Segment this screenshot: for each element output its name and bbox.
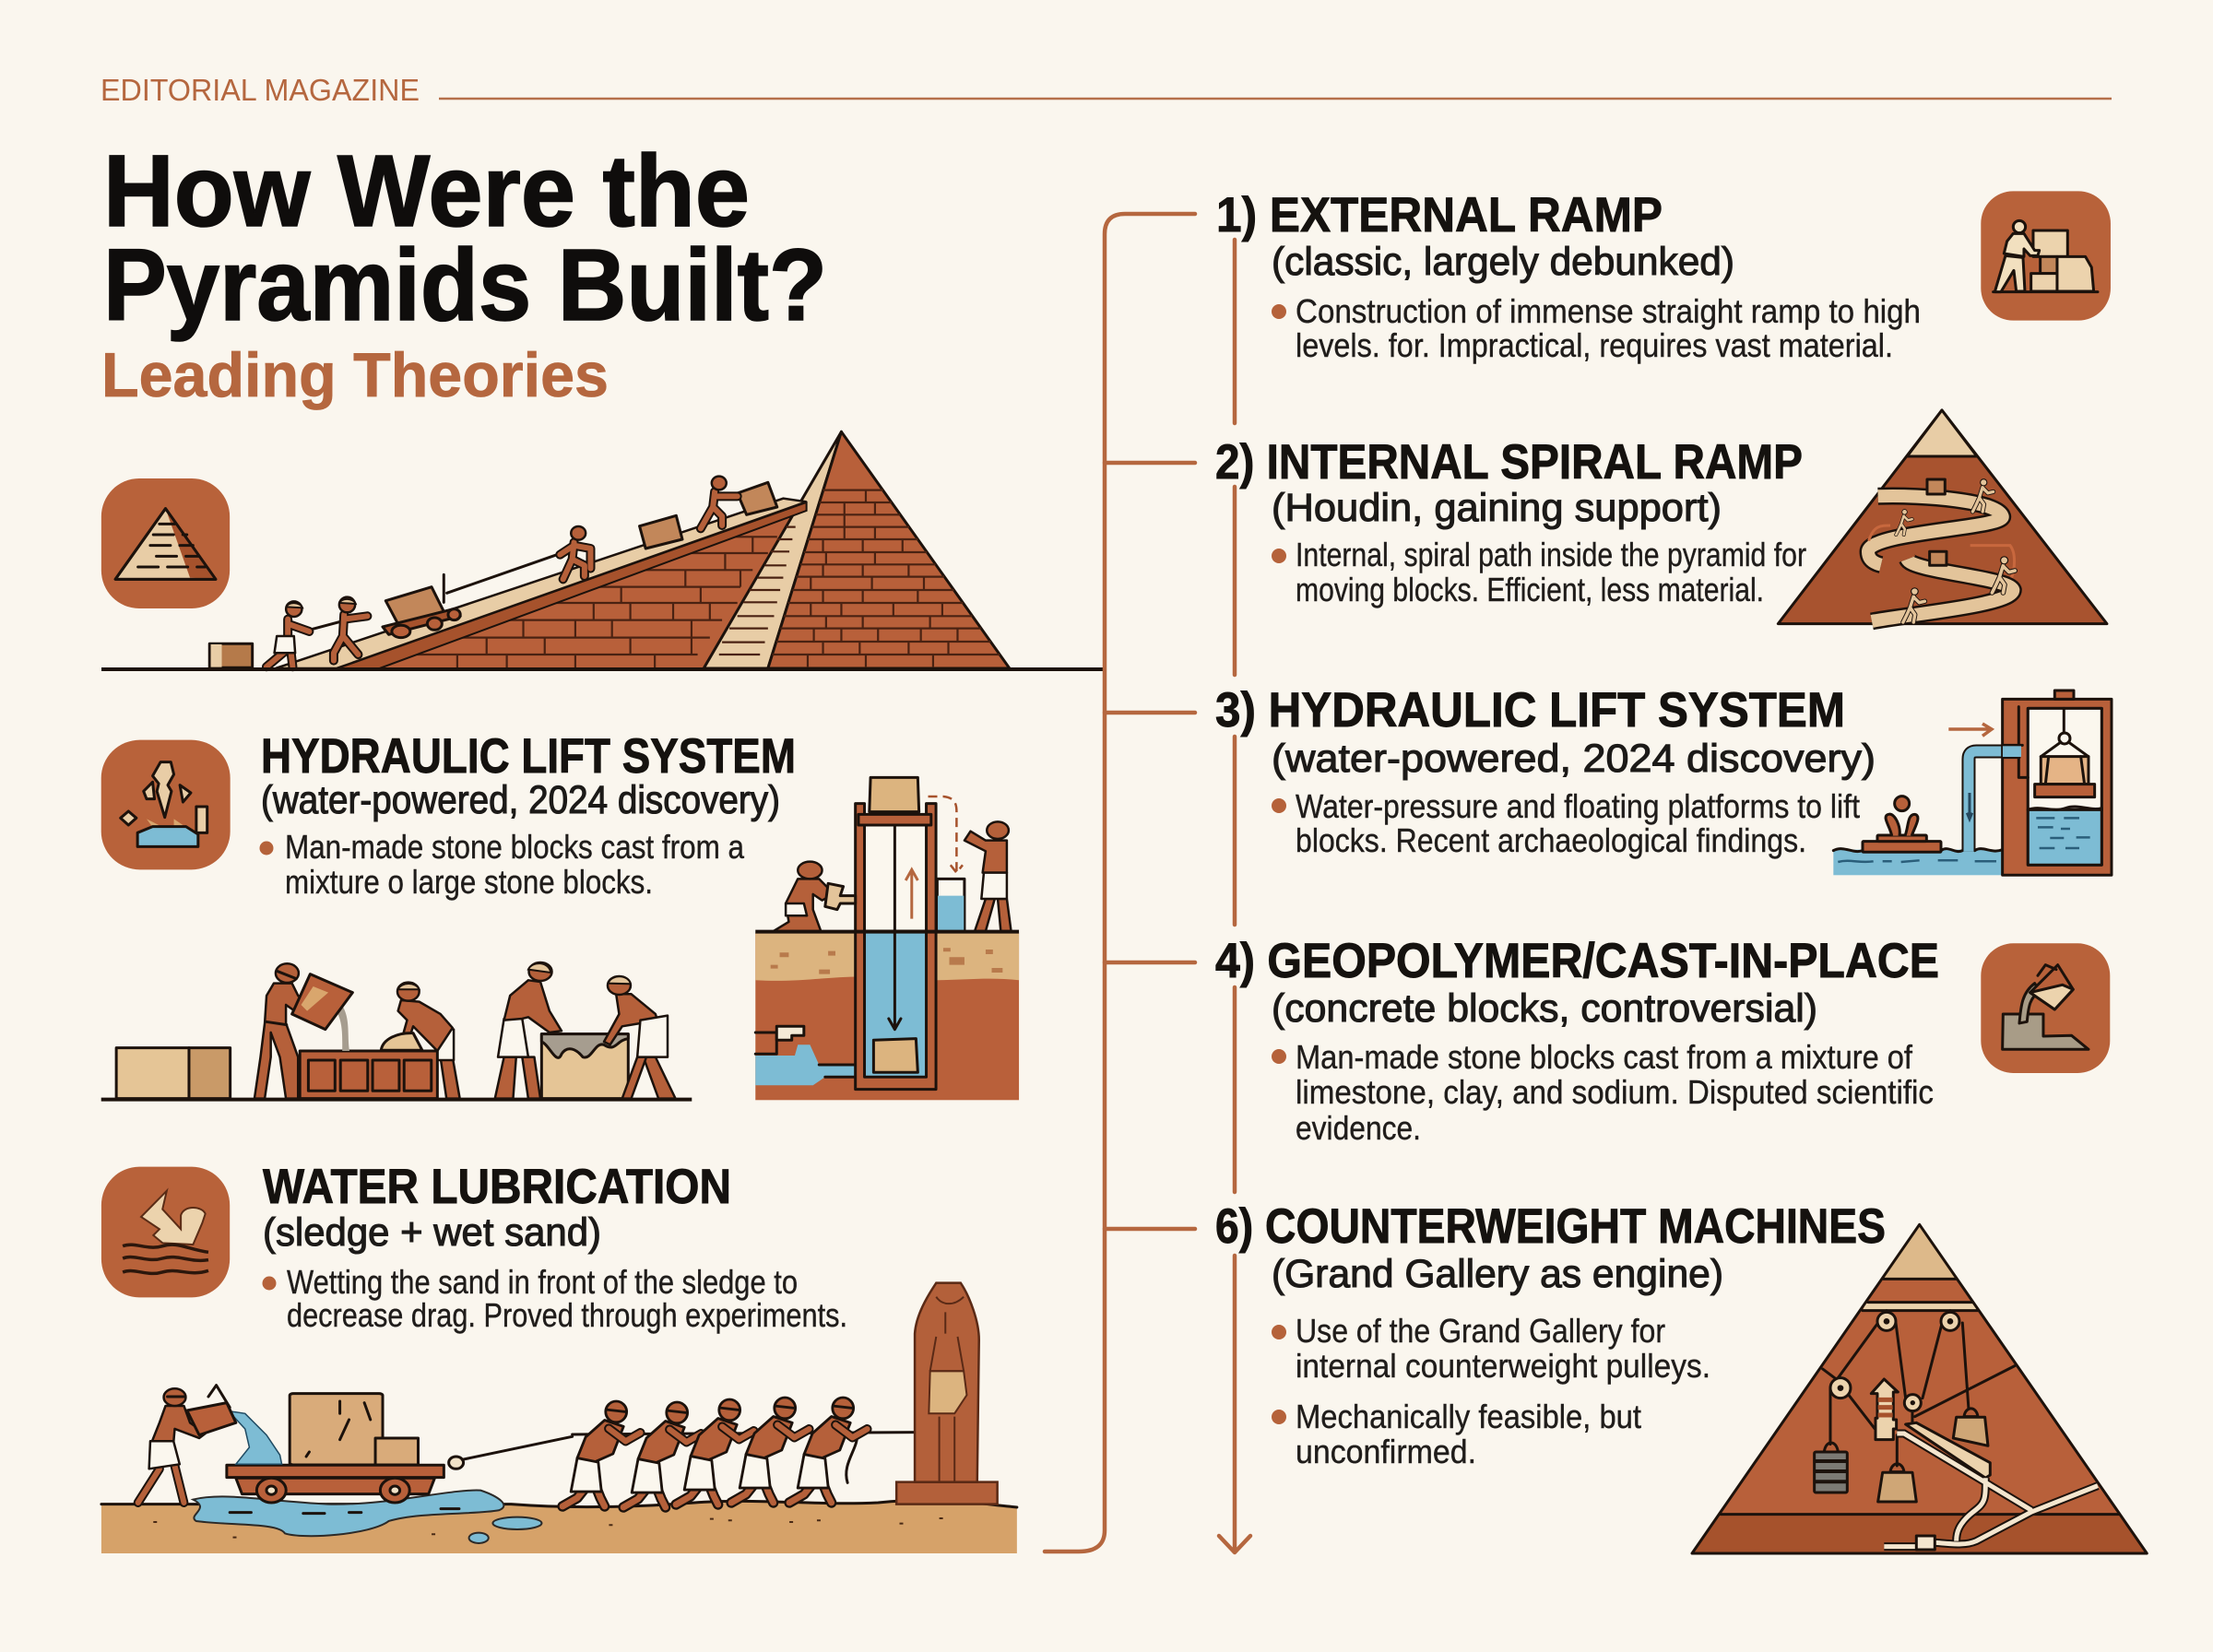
theory 2: internal spiral ramp: Internal, spiral path inside the pyramid for	[1296, 536, 1806, 573]
ramp brick base	[337, 502, 807, 668]
blocks on ramp	[640, 515, 682, 549]
theory 1: external ramp: Construction of immense straight ramp to high	[1296, 292, 1921, 330]
theory 4: geopolymer	[1215, 934, 1939, 1147]
standing worker right	[604, 976, 676, 1099]
magazine label: EDITORIAL MAGAZINE	[101, 73, 420, 107]
theory 2: internal spiral ramp: (Houdin, gaining support)	[1272, 486, 1722, 530]
subtitle: Leading Theories	[101, 340, 609, 410]
light slab	[704, 431, 841, 668]
illustration: hydraulic platform	[1833, 690, 2112, 875]
title: How Were the	[103, 135, 750, 248]
soil	[755, 933, 1019, 1100]
theory 4: geopolymer: (concrete blocks, controversial)	[1272, 986, 1817, 1031]
puddle	[193, 1491, 503, 1536]
tank	[937, 879, 964, 931]
worker behind mold	[397, 983, 460, 1099]
faucet	[776, 1026, 804, 1040]
cart with block	[383, 587, 460, 638]
arrow	[1948, 724, 1992, 736]
illustration: sledge on wet sand	[101, 1283, 1017, 1553]
standing worker	[964, 821, 1012, 931]
theory 1: external ramp: (classic, largely debunked)	[1272, 240, 1734, 284]
theory 1: external ramp	[1216, 188, 1921, 364]
ramp workers	[1896, 479, 2015, 622]
illustration: external ramp pyramid	[209, 431, 1010, 668]
theory 6: counterweight machines: 6) COUNTERWEIGHT MACHINES	[1215, 1199, 1886, 1254]
worker	[1994, 220, 2040, 292]
left section: hydraulic text	[260, 729, 796, 901]
frame	[2003, 699, 2112, 875]
shaft ground line	[755, 930, 1019, 934]
weights	[1815, 1409, 1988, 1502]
kneeling worker	[774, 862, 856, 931]
stone blocks	[290, 1394, 383, 1465]
icon: pyramid	[101, 478, 230, 608]
ground line	[101, 667, 1105, 671]
theory 2: internal spiral ramp: 2) INTERNAL SPIRAL RAMP	[1215, 435, 1803, 490]
bucket	[187, 1403, 236, 1435]
left section: hydraulic text: mixture o large stone blocks.	[285, 863, 653, 901]
icon: water lubrication	[101, 1167, 230, 1297]
theory 4: geopolymer: evidence.	[1296, 1109, 1421, 1147]
left section: water lubrication text: decrease drag. Proved through experiments.	[287, 1296, 847, 1334]
theory 6: counterweight machines: Use of the Grand Gallery for	[1296, 1312, 1665, 1350]
water channel	[755, 1044, 865, 1085]
icon: pouring concrete	[1981, 943, 2110, 1073]
icon: hydraulic block casting	[101, 740, 231, 869]
workers on ramp	[266, 477, 738, 667]
theory 6: counterweight machines: (Grand Gallery as engine)	[1272, 1252, 1723, 1296]
pipe	[1969, 751, 2022, 851]
raft	[1863, 842, 1941, 852]
sand	[101, 1500, 1017, 1553]
shaft tower	[1871, 1379, 1898, 1440]
theory 6: counterweight machines	[1215, 1199, 1886, 1470]
dashed arrow	[929, 796, 963, 873]
poured stream	[328, 997, 349, 1051]
main pyramid face	[768, 431, 1010, 668]
left section: hydraulic text: HYDRAULIC LIFT SYSTEM	[261, 729, 796, 784]
theory 3: hydraulic lift system: blocks. Recent archaeological findings.	[1296, 821, 1806, 859]
left section: water lubrication text: (sledge + wet sand)	[263, 1210, 601, 1255]
illustration: hydraulic shaft	[755, 777, 1019, 1100]
theory 6: counterweight machines: unconfirmed.	[1296, 1433, 1476, 1470]
theory 1: external ramp: levels. for. Impractical, requires vast material.	[1296, 326, 1893, 364]
mold box	[300, 1051, 437, 1099]
theory 3: hydraulic lift system	[1215, 683, 1876, 859]
theory 6: counterweight machines: internal counterweight pulleys.	[1296, 1347, 1710, 1385]
statue	[896, 1482, 998, 1504]
water stream	[229, 1411, 282, 1464]
seated person	[1895, 796, 1910, 811]
title: Pyramids Built?	[103, 229, 827, 342]
theory 2: internal spiral ramp: moving blocks. Efficient, less material.	[1296, 571, 1764, 608]
illustration: counterweight pyramid	[1692, 1224, 2147, 1553]
theory 1: external ramp: 1) EXTERNAL RAMP	[1216, 188, 1663, 242]
rope	[449, 1457, 464, 1469]
shaft	[865, 825, 927, 933]
pulley ropes	[1823, 1311, 2015, 1466]
pulling workers	[562, 1398, 867, 1507]
theory 4: geopolymer: limestone, clay, and sodium. Disputed scientific	[1296, 1073, 1934, 1111]
ramp surface	[337, 502, 807, 668]
ropes	[309, 555, 557, 630]
grand gallery	[1906, 1422, 1990, 1478]
standing worker left	[495, 962, 562, 1099]
pouring worker	[138, 1388, 206, 1503]
theory 4: geopolymer: 4) GEOPOLYMER/CAST-IN-PLACE	[1215, 934, 1939, 988]
bucket	[292, 974, 352, 1030]
theory 3: hydraulic lift system: (water-powered, 2024 discovery)	[1272, 737, 1876, 781]
worker pouring	[254, 963, 319, 1099]
left section: hydraulic text: (water-powered, 2024 discovery)	[261, 778, 780, 822]
sledge	[236, 1478, 434, 1494]
illustration: spiral ramp pyramid	[1778, 410, 2107, 624]
theory 3: hydraulic lift system: 3) HYDRAULIC LIFT SYSTEM	[1215, 683, 1845, 738]
left section: water lubrication text	[262, 1160, 847, 1334]
left section: water lubrication text: WATER LUBRICATION	[263, 1160, 731, 1214]
round stone	[381, 1033, 422, 1050]
theory 2: internal spiral ramp	[1215, 435, 1806, 608]
theory 3: hydraulic lift system: Water-pressure and floating platforms to lift	[1296, 787, 1860, 825]
finished block	[116, 1048, 189, 1099]
pulleys	[1830, 1312, 1959, 1411]
suspended block	[2063, 708, 2065, 733]
illustration: casting blocks	[101, 962, 692, 1100]
dripped block	[541, 1034, 628, 1099]
left section: water lubrication text: Wetting the sand in front of the sledge to	[287, 1263, 798, 1301]
theory 6: counterweight machines: Mechanically feasible, but	[1296, 1398, 1641, 1435]
bracket timeline	[1045, 214, 1250, 1552]
title	[103, 135, 827, 342]
casting ground line	[101, 1098, 692, 1102]
theory 4: geopolymer: Man-made stone blocks cast from a mixture of	[1296, 1038, 1913, 1076]
block on ground	[209, 643, 253, 667]
left section: hydraulic text: Man-made stone blocks cast from a	[285, 828, 745, 866]
icon: worker with blocks	[1981, 191, 2111, 321]
